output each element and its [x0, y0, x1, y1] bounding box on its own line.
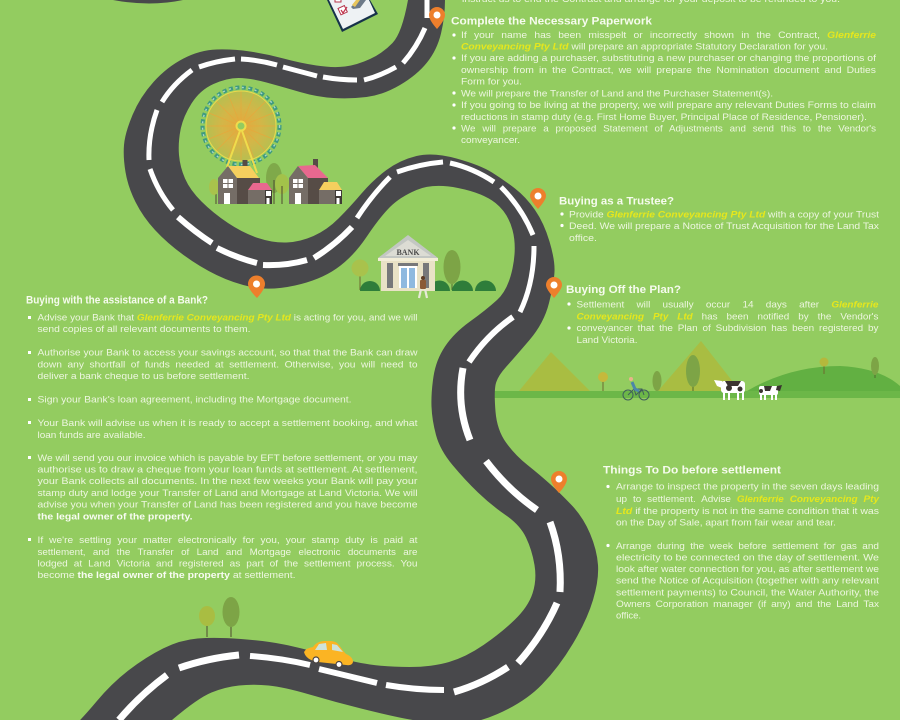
text block: things to do before settlement: Arrange to inspect the property in the seven days leading: [616, 482, 879, 492]
text block: buying off the plan: Conveyancing Pty Ltd has been notified by the Vendor's: [576, 312, 879, 322]
text block: buying with the assistance of a bank: the legal owner of the property.: [38, 512, 192, 522]
text block: things to do before settlement: [603, 464, 880, 622]
icon: person walking: [419, 276, 427, 298]
house: left: [218, 160, 272, 204]
text block: buying with the assistance of a bank: authorise us to draw a cheque from your loan funds at settlement. At settlement,: [38, 464, 418, 476]
icon: bicycle rider: [623, 377, 649, 400]
road fragment top left: [113, 0, 183, 4]
text block: buying with the assistance of a bank: Buying with the assistance of a Bank?: [26, 294, 208, 306]
text block: buying with the assistance of a bank: advise you when your Transfer of Land has been registered and you have become: [38, 500, 418, 510]
text block: things to do before settlement: look after water connection for you, as after settlement we: [616, 564, 879, 575]
icon: large cow: [714, 380, 745, 400]
pin: off the plan: [546, 277, 562, 298]
text block: buying with the assistance of a bank: your Bank collects all documents. In the next few weeks your Bank will pay your: [38, 476, 418, 487]
text block: things to do before settlement: up to settlement. Advise Glenferrie Conveyancing Pty: [616, 494, 880, 505]
text block: buying off the plan: Land Victoria.: [576, 335, 638, 346]
text block: complete the necessary paperwork: If you going to be living at the property, we will prepare any relevant Duties Forms to claim: [461, 100, 876, 111]
icon: clipboard checklist: [327, 0, 378, 32]
text block: buying off the plan: Settlement will usually occur 14 days after Glenferrie: [576, 300, 879, 310]
text block: complete the necessary paperwork: [451, 0, 877, 146]
icon: small cow: [759, 385, 782, 400]
text block: complete the necessary paperwork: reductions in stamp duty (e.g. First Home Buyer, Principal Place of Residence, Pensioner).: [461, 112, 867, 123]
text block: complete the necessary paperwork: We will prepare a proposed Statement of Adjustments and send this to the Vendor's: [461, 124, 876, 134]
text block: buying with the assistance of a bank: We will send you our invoice which is payable by EFT before settlement, or you may: [38, 453, 418, 464]
text block: things to do before settlement: settlement payments) to Council, the Water Authority, the: [616, 588, 879, 598]
text block: complete the necessary paperwork: Form for you.: [461, 76, 522, 88]
countryside scene: [490, 341, 900, 398]
text block: complete the necessary paperwork: Conveyancing Pty Ltd will prepare an appropriate Statutory Declaration for you.: [461, 42, 828, 52]
text block: buying as a trustee: [559, 196, 879, 244]
text block: buying as a trustee: Provide Glenferrie Conveyancing Pty Ltd with a copy of your Trust: [569, 210, 879, 220]
text block: buying with the assistance of a bank: Your Bank will advise us when it is ready to accept a settlement booking, and what: [38, 418, 418, 429]
text block: buying off the plan: conveyancer that the Plan of Subdivision has been registered by: [576, 323, 879, 334]
road lane markings: [119, 0, 560, 720]
text block: buying with the assistance of a bank: Authorise your Bank to access your savings account, so that that the Bank can draw: [38, 348, 418, 358]
pin: paperwork: [429, 7, 445, 29]
text block: buying as a trustee: office.: [569, 233, 597, 244]
text block: things to do before settlement: Arrange during the week before settlement for gas and: [616, 541, 879, 552]
icon: yellow car: [304, 641, 353, 668]
text block: things to do before settlement: send the Notice of Acquisition (together with any relevant: [616, 576, 879, 586]
text block: things to do before settlement: Owners Corporation manager (if any) and the Land Tax: [616, 599, 879, 610]
text block: buying with the assistance of a bank: Advise your Bank that Glenferrie Conveyancing Pty Ltd is acting for you, and we will: [38, 312, 418, 324]
text block: things to do before settlement: electricity to be connected on the day of settlement. We: [616, 552, 879, 564]
text block: complete the necessary paperwork: If your name has been misspelt or incorrectly shown in the Contract, Glenferrie: [461, 30, 877, 41]
text block: complete the necessary paperwork: We will prepare the Transfer of Land and the Purchaser Statement(s).: [461, 88, 773, 100]
illustration: bank: [352, 235, 496, 298]
text block: buying with the assistance of a bank: settlement, and the Transfer of Land and Mortgage electronic documents are: [38, 547, 418, 558]
text block: buying with the assistance of a bank: down any shortfall of funds needed at settlement. Otherwise, you will need to: [38, 360, 418, 370]
text block: complete the necessary paperwork: If you are adding a purchaser, substituting a new purchaser or changing the proportions of: [461, 53, 876, 64]
text block: complete the necessary paperwork: conveyancer.: [461, 135, 520, 146]
text block: buying with the assistance of a bank: [26, 294, 418, 581]
text block: buying with the assistance of a bank: stamp duty and lodge your Transfer of Land and Mortgage at Land Victoria. We will: [38, 488, 417, 499]
pin: trustee: [530, 188, 546, 209]
text block: buying with the assistance of a bank: Sign your Bank's loan agreement, including the Mortgage document.: [38, 394, 352, 406]
text block: complete the necessary paperwork: Complete the Necessary Paperwork: [451, 16, 653, 28]
text block: buying with the assistance of a bank: send copies of all relevant documents to them.: [38, 324, 250, 335]
text block: buying off the plan: [566, 284, 879, 346]
road: [70, 0, 598, 720]
text block: things to do before settlement: on the Day of Sale, apart from fair wear and tear.: [616, 518, 836, 528]
pin: before settlement: [551, 471, 567, 493]
illustration: roadside trees: [199, 597, 240, 637]
pin: bank: [248, 276, 265, 298]
illustration: bank: BANK: [396, 248, 420, 257]
house: right: [289, 159, 342, 204]
text block: things to do before settlement: Things To Do before settlement: [603, 464, 781, 476]
text block: buying off the plan: Buying Off the Plan?: [566, 284, 681, 296]
illustration: ferris wheel: [202, 88, 280, 173]
text block: buying with the assistance of a bank: If we're settling your matter electronically for you, your stamp duty is paid at: [38, 535, 418, 546]
text block: buying with the assistance of a bank: lodged at Land Victoria and registered as part of the settlement process. You: [38, 558, 418, 570]
text block: buying as a trustee: Buying as a Trustee?: [559, 196, 674, 208]
text block: things to do before settlement: Ltd if the property is not in the same condition that it was: [616, 506, 879, 517]
text block: buying with the assistance of a bank: become the legal owner of the property at settlement.: [38, 570, 296, 581]
text block: buying with the assistance of a bank: loan funds are available.: [38, 430, 146, 441]
text block: buying with the assistance of a bank: deliver a bank cheque to us before settlement.: [38, 371, 249, 382]
text block: things to do before settlement: office.: [616, 610, 641, 622]
text block: complete the necessary paperwork: ownership from in the Contract, we will prepare the Nomination document and Duties: [461, 65, 876, 76]
illustration: houses and trees: [209, 159, 342, 204]
text block: buying as a trustee: Deed. We will prepare a Notice of Trust Acquisition for the Land Tax: [569, 221, 879, 232]
